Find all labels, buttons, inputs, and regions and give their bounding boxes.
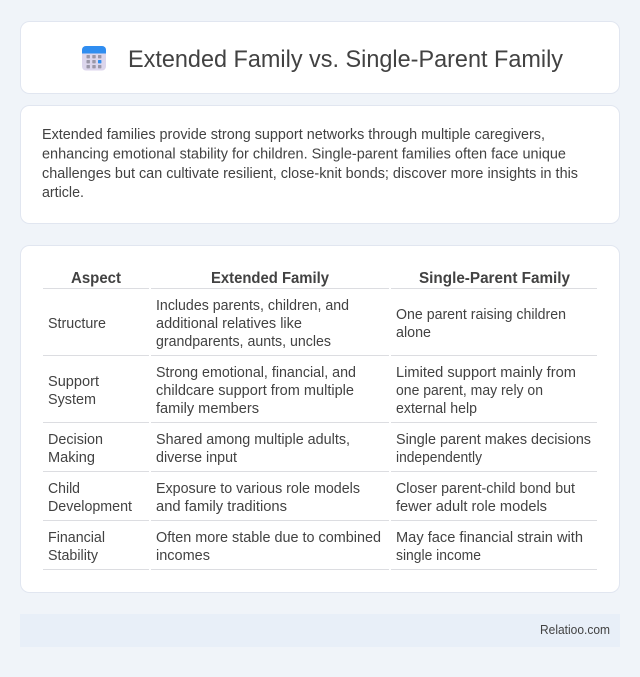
row: child development: [48, 481, 575, 515]
row: decision making: Single parent makes decisions: [396, 432, 591, 448]
panel: intro: [20, 106, 620, 224]
row: structure: additional relatives like: [156, 316, 302, 332]
row: child development: Development: [48, 499, 132, 515]
row: structure: grandparents, aunts, uncles: [156, 334, 331, 350]
row: child development: Child: [48, 481, 80, 497]
row: support system: family members: [156, 401, 259, 417]
table header: [71, 270, 570, 287]
row: decision making: diverse input: [156, 450, 237, 466]
row: structure: Includes parents, children, and: [156, 298, 349, 314]
row: decision making: [48, 432, 591, 466]
row: support system: [48, 365, 576, 417]
row: support system: childcare support from multiple: [156, 383, 354, 399]
table header: Aspect: [71, 270, 122, 287]
title: Extended Family vs. Single-Parent Family: [128, 46, 564, 73]
row: structure: alone: [396, 325, 431, 341]
row: child development: Exposure to various role models: [156, 481, 360, 497]
panel: title card: [20, 22, 620, 94]
row: financial stability: Often more stable due to combined: [156, 530, 381, 546]
text block: intro paragraph: article.: [42, 185, 84, 201]
row: support system: System: [48, 392, 96, 408]
row: child development: Closer parent-child bond but: [396, 481, 575, 497]
row: decision making: independently: [396, 450, 483, 466]
row: support system: Limited support mainly from: [396, 365, 576, 381]
row: child development: and family traditions: [156, 499, 287, 515]
text block: intro paragraph: [42, 127, 578, 201]
row: child development: fewer adult role models: [396, 499, 547, 515]
footer: [20, 614, 620, 647]
text block: intro paragraph: challenges but can cultivate resilient, close-knit bonds; discover more insights in this: [42, 166, 578, 182]
row: support system: Strong emotional, financial, and: [156, 365, 356, 381]
row: support system: Support: [48, 374, 99, 390]
text block: intro paragraph: enhancing emotional stability for children. Single-parent families often face unique: [42, 146, 566, 162]
row: financial stability: May face financial strain with: [396, 530, 583, 546]
row: decision making: Decision: [48, 432, 103, 448]
row: financial stability: incomes: [156, 548, 210, 564]
text block: intro paragraph: Extended families provide strong support networks through multiple caregivers,: [42, 127, 545, 143]
row: financial stability: [48, 530, 583, 564]
row: structure: [48, 298, 566, 350]
row: structure: Structure: [48, 316, 106, 332]
icon: calendar: [82, 46, 106, 70]
table header: Single-Parent Family: [419, 270, 570, 287]
row: decision making: Making: [48, 450, 95, 466]
footer credit: Relatioo.com: [540, 622, 610, 637]
panel: comparison table: [20, 246, 620, 592]
row: structure: One parent raising children: [396, 307, 566, 323]
row: support system: one parent, may rely on: [396, 383, 543, 399]
row: financial stability: Stability: [48, 548, 99, 564]
row: decision making: Shared among multiple adults,: [156, 432, 350, 448]
row: financial stability: single income: [396, 548, 481, 564]
row: support system: external help: [396, 401, 477, 417]
row: financial stability: Financial: [48, 530, 105, 546]
table header: Extended Family: [211, 270, 329, 287]
